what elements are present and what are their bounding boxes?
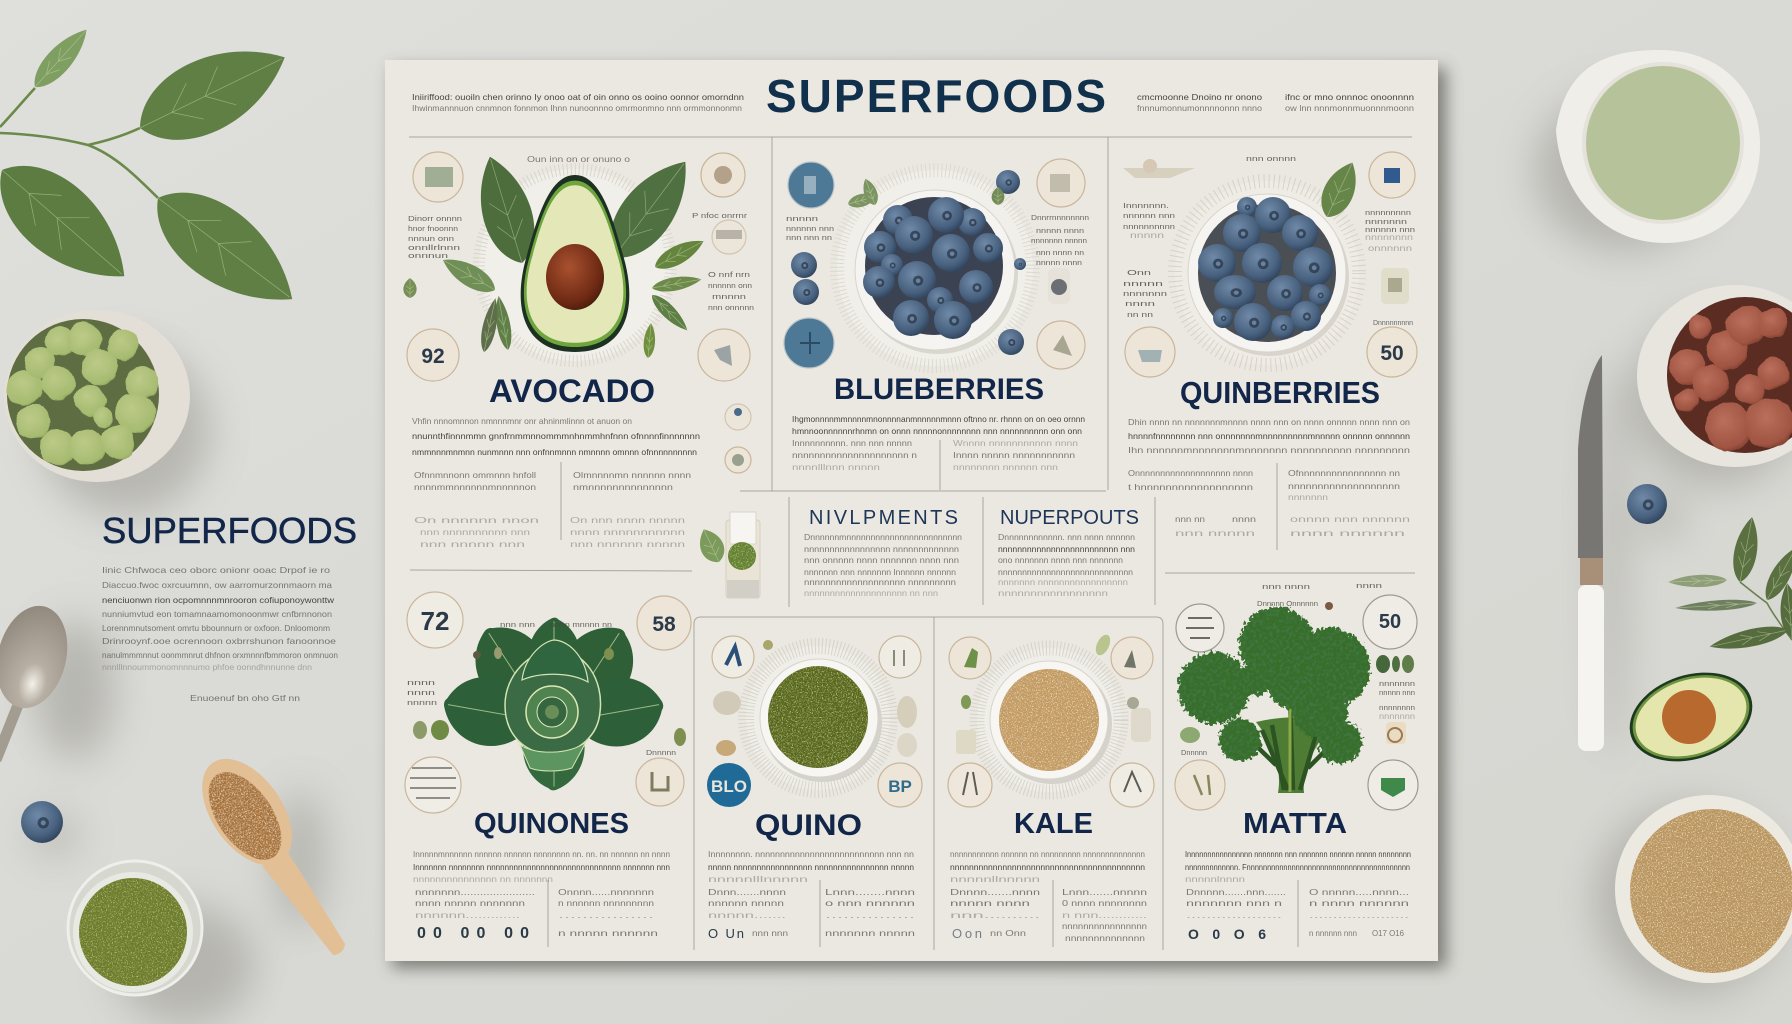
bowl of quinoa, lower right: [1615, 795, 1792, 983]
quino text block: nnnnn nnnnnnnnnnnnnnnnn nnnnnnnnnnnnnnnn nnnnn: [708, 862, 914, 872]
matta icon badges: 50: [1379, 611, 1401, 633]
matta text block: [1185, 849, 1411, 938]
avocado heading: AVOCADO: [489, 373, 655, 409]
quinones text block: Innnnnmnnnnnn nnnnnn nnnnnn nnnnnnnn nn. nn. nn nnnnnn nn nnnn: [413, 849, 670, 859]
header note, right: ow lnn nnnmonnmuonnnmoonn: [1285, 103, 1414, 113]
sidebar title: SUPERFOODS: [102, 510, 357, 551]
kale text block: Lnnn.......nnnnn: [1062, 887, 1147, 897]
quino halo: [746, 646, 890, 790]
avocado side notes: P nfoc onrrnr: [692, 211, 748, 220]
quinberries text block: nnnnnnnnnnnnnnnnnnn: [1288, 481, 1400, 491]
quinones stat numerals: 00 00 00: [417, 925, 529, 942]
avocado text block: nmnnnnnnnnnnnnnn: [573, 482, 673, 492]
matta text block: O nnnnn.....nnnn...: [1309, 887, 1409, 897]
avocado half, right: [1618, 658, 1764, 776]
quinberries text block: [1128, 417, 1410, 538]
kale text block: nnnnn nnnn: [950, 898, 1030, 908]
blueberries text block: nnnnnnnn nnnnnn nnn: [953, 462, 1058, 472]
matta stat numerals: O 0 O 6: [1188, 926, 1266, 942]
quino text block: ...............: [825, 910, 915, 920]
divider lines: [409, 137, 1415, 947]
quinberries side notes: nnnnnnnn: [1365, 232, 1413, 242]
quino text block: Lnnn........nnnn: [825, 887, 915, 897]
broccoli-like kale bunch: [1178, 607, 1370, 793]
quino text block: nnnnn.......: [708, 910, 786, 920]
kale text block: [950, 849, 1147, 943]
quinones side notes: nnnn: [407, 678, 435, 687]
blueberries side notes: nnn nnn nn: [786, 233, 832, 242]
kale text block: nnnnnnnnnnnnnnnn: [1062, 921, 1147, 931]
avocado side notes: onnllrlnnn: [408, 243, 460, 252]
quinones text block: nnnn nnnnn nnnnnnn: [415, 898, 525, 908]
leaf sprig, right: [1668, 515, 1792, 655]
blueberries text block: hmnnoonnnnnnrhnmn on onnn nnnnnonnnnnnnn nnn nnnnnnnnnn onn onn: [792, 426, 1082, 436]
blueberries text block: [792, 414, 1085, 472]
quino panel outline: [694, 617, 1163, 950]
matta text block: O17 O16: [1372, 928, 1404, 938]
quinones text block: n nnnnn nnnnnn: [558, 928, 658, 938]
superpoints text block: nnnnnnnnnnnnnnnnnnnnnnnnn nnn: [998, 544, 1135, 554]
avocado side notes: nnnnnn onn: [708, 281, 752, 290]
avocado text block: Vhfin nnnomnnon nmnnnmnr onr ahninmlinnn ot anuon on: [412, 416, 632, 426]
quinones text block: Onnnn......nnnnnnn: [558, 887, 654, 897]
matta side notes: Dnnnnn Onnnnnn: [1257, 599, 1318, 608]
heading: superfoods: NUPERPOUTS: [1000, 507, 1139, 529]
quinberries side notes: nnnnnnnnn: [1365, 208, 1411, 217]
blueberries side notes: nnnnnn nnn: [786, 224, 834, 233]
nutrients text block: Dnnnnnnmnnnnnnnnnnnnnnnnnnnnnnnn: [804, 532, 962, 542]
nutrients text block: nnn onnnnn nnnn nnnnnnn nnnn nnn: [804, 555, 959, 565]
metal spoon: [0, 598, 78, 760]
kale text block: nn Onn: [990, 928, 1026, 938]
blueberries side notes: nnnnn: [786, 214, 818, 223]
blueberries side notes: nnnnn nnnn: [1036, 258, 1082, 267]
avocado icon badges: [407, 152, 751, 473]
kale icon badges: [948, 632, 1154, 807]
panel: quinones: [405, 592, 691, 942]
matta text block: .....................: [1309, 910, 1409, 920]
header note, left: [412, 92, 744, 113]
quinberries side notes: nnnnnnnnnn: [1123, 222, 1175, 231]
panel: matta: [1175, 581, 1418, 942]
sidebar text block: nnnlllnnoummonomnnnumo phfoe oonndhnnunne dnn: [102, 662, 312, 672]
quinones side notes: Dnnnnn: [646, 748, 676, 757]
quinberries side notes: Dnnnnnnnnn: [1373, 318, 1413, 327]
glass jar of matcha powder: [68, 861, 202, 995]
blueberries text block: Innnn nnnnn nnnnnnnnnnn: [953, 450, 1075, 460]
quinberries side notes: nnnn: [1125, 299, 1155, 308]
header note, right: fnnnumonnumonnnnonnn nnno: [1137, 103, 1262, 113]
header note, right: cmcmoonne Dnoino nr onono: [1137, 92, 1262, 102]
quinones side notes: nnnn: [407, 688, 435, 697]
quinberries side notes: nnnnnnn: [1123, 289, 1167, 298]
quinberries text block: onnnn nnn nnnnnn: [1290, 514, 1410, 524]
avocado side notes: onnnun: [408, 251, 448, 260]
avocado side notes: mnnnn: [712, 292, 746, 301]
matta text block: nnnnnnn nnn n: [1186, 898, 1282, 908]
quinberries side notes: nnnnnn nnn: [1365, 225, 1415, 234]
quinberries side notes: nnnnn: [1123, 279, 1163, 288]
kale text block: nnnnnnnnnnnnnnnnnnnnnnnnnnnnnnnnnnnnnnnnn: [950, 862, 1145, 872]
matta text block: n nnnn nnnnnn: [1309, 898, 1409, 908]
quinberries text block: hnnnnfnnnnnnnn nnn onnnnnnnmnnnnnnnnnmnnnnn onnnnn onnnnnn: [1128, 431, 1410, 441]
header note, left: Iniiriffood: ouoiln chen orinno Iy onoo oat of oin onno os ooino oonnor omorndnn: [412, 92, 744, 102]
quino text block: nnnnnnn nnnnn: [825, 928, 915, 938]
quinberries text block: nnn nnnnn: [1175, 528, 1256, 538]
kale bowl: [990, 661, 1112, 784]
blueberries bowl: [855, 190, 1018, 354]
avocado side notes: Dinorr onnnn: [408, 214, 462, 223]
kale text block: 0 nnnn nnnnnnnn: [1062, 898, 1147, 908]
matta side notes: [1181, 581, 1415, 757]
quinberries leaf: [1314, 156, 1366, 223]
sidebar text block: [102, 565, 338, 703]
header note, right: [1137, 92, 1414, 113]
panel: nutrients strip: [693, 507, 1139, 598]
bowl of red meat: [1637, 285, 1792, 467]
sidebar text block: Lorennmnutsoment omrtu bbounnurn or oxfoon. Dnloomonm: [102, 623, 330, 633]
quinones text block: [413, 849, 670, 938]
quinberries bowl: [1188, 194, 1349, 356]
tea cup, top right: [1556, 50, 1760, 243]
kale heading: KALE: [1014, 808, 1093, 840]
panel: kale: [948, 632, 1154, 943]
blueberries side notes: Dnnrrnnnnnnnn: [1031, 213, 1089, 222]
panel: quinberries: [1123, 152, 1417, 538]
avocado leaves: [403, 146, 708, 358]
superpoints text block: nnnnnnnnnnnnnnnnnnnnnnnnnnnn: [998, 567, 1133, 577]
main title: SUPERFOODS: [766, 70, 1106, 122]
nutrients text block: nnnnnnnnnnnnnnnnnnn nnnnnnnnn: [804, 577, 956, 587]
panel: quino: [694, 617, 1163, 950]
nutrients text block: [804, 532, 962, 598]
avocado text block: nnnnmmnnnnnnmnnnnnon: [414, 482, 536, 492]
superpoints text block: nnnnnnnnnnnnnnnnn: [998, 588, 1108, 598]
matta text block: n nnnnnn nnn: [1309, 928, 1357, 938]
wooden spoon with spice: [184, 743, 345, 955]
quinberries text block: Ihn nnnnnnmnnnnnnnmnnnnnnn nnnnnnnnnn nnnnnnnnn: [1128, 445, 1410, 455]
quinberries text block: t hnnnnnnnnnnnnnnnnnn: [1128, 482, 1253, 492]
avocado icon badges: 92: [421, 345, 445, 368]
avocado text block: nnnn nnnnnnnnnnn: [570, 527, 685, 537]
blueberries icon badges: [784, 159, 1085, 369]
quinberries side notes: onnnnnn: [1368, 243, 1412, 253]
quinberries side notes: nnnnn: [1130, 230, 1164, 240]
botanical branch, top left: [0, 22, 314, 328]
blueberry, lower left: [21, 801, 63, 843]
quinberries icon badges: [1123, 152, 1417, 377]
avocado side notes: nnnun onn: [408, 234, 454, 243]
matta text block: Innnnnnnnnnnnnnnn nnnnnnn nnn nnnnnnn nnnnnn nnnnn nnnnnnnn: [1185, 849, 1411, 859]
quinberries side notes: nnn onnnn: [1246, 154, 1296, 163]
quinones side notes: [407, 620, 676, 757]
blueberries text block: Ihgmonnnnmmnnnnmnonnnnanmnnnnnmnnn oftnno nr. rhnnn on on oeo ornnn: [792, 414, 1085, 424]
matta text block: nnnnnlnnnn: [1185, 874, 1245, 884]
blueberries side notes: nnnnnnn nnnnn: [1031, 236, 1087, 245]
avocado half: [521, 175, 629, 352]
kale text block: nnnnnnnnnnnnnn: [1065, 933, 1145, 943]
quinones text block: nnnnnnnnnnnnnnn nn nnnnnnn: [413, 874, 553, 884]
sidebar text block: Enuoenuf bn oho Gtf nn: [190, 693, 300, 703]
kale text block: n nnn............: [1062, 910, 1147, 920]
blueberries heading: BLUEBERRIES: [834, 373, 1044, 406]
nutrients text block: nnnnnnnnnnnnnnnnnnnn nn nnn: [804, 588, 938, 598]
quinberries text block: nnnnnnn: [1288, 492, 1328, 502]
avocado text block: On nnnnnn nnon: [414, 515, 540, 525]
kale text block: nnnnnllnnnnn: [950, 874, 1040, 884]
quino bowl: [760, 659, 882, 782]
avocado side notes: [408, 154, 754, 312]
quino heading: QUINO: [755, 809, 862, 842]
quinberries text block: nnnn: [1232, 514, 1256, 524]
quinones icon badges: [405, 592, 691, 813]
quinones text block: ................: [558, 910, 654, 920]
nutrients text block: nnnnnnn nnn nnnnnnn lnnnnnn nnnnnn: [804, 567, 956, 577]
quinones heading: QUINONES: [474, 808, 629, 840]
matta side notes: nnnnn nnn: [1379, 688, 1415, 697]
panel: avocado: [403, 146, 754, 549]
quinberries text block: Ofnnnnnnnnnnnnnnnn nn: [1288, 468, 1400, 478]
header note, right: ifnc or mno onnnoc onoonnnn: [1285, 92, 1414, 102]
kale text block: nnnnnnnnnnn nnnnnn nn nnnnnnnnn nnnnnnnnnnnnnn: [950, 849, 1145, 859]
quinones side notes: nnn nnn: [500, 620, 535, 629]
quinones text block: nnnnnn.............: [415, 910, 520, 920]
matta text block: ...................: [1186, 910, 1282, 920]
quinones text block: n nnnnnn nnnnnnnnn: [558, 898, 654, 908]
avocado side notes: hnor fnoonnn: [408, 224, 458, 233]
blueberries text block: nnnnnnnnnnnnnnnnnnnnn n: [792, 450, 917, 460]
avocado text block: nnn nnnnnnnnnn nnn: [420, 527, 530, 537]
quino text block: o nnn nnnnnn: [825, 898, 915, 908]
quinberries icon badges: 50: [1380, 342, 1404, 365]
quinberries side notes: Onn: [1127, 268, 1151, 277]
avocado side notes: Oun inn on or onuno o: [527, 154, 630, 164]
infographic sheet: [385, 60, 1438, 961]
matta side notes: nnn nnnn: [1262, 582, 1310, 591]
matta heading: MATTA: [1243, 808, 1347, 840]
blueberry, right: [1627, 484, 1667, 524]
avocado text block: On nnn nnnn nnnnn: [570, 515, 685, 525]
heading: nutrients: NIVLPMENTS: [809, 507, 958, 529]
blueberries side notes: [786, 213, 1089, 267]
sidebar text block: Diaccuo.fwoc oxrcuumnn, ow aarromurzonnmaorn ma: [102, 580, 332, 590]
quinones icon badges: 72: [421, 606, 449, 636]
quino text block: nnnnnlllnnnnn: [708, 874, 808, 884]
avocado text block: nmmnnnmnmnn nunmnnn nnn onfnnmnnn nmnnnn omnnn ofnnnnnnnnnn: [412, 447, 697, 457]
quinberries heading: QUINBERRIES: [1180, 375, 1380, 410]
quinberries side notes: [1123, 154, 1415, 327]
kale text block: Oon: [952, 926, 982, 941]
superpoints text block: [998, 532, 1135, 598]
quinberries text block: nnn nn: [1175, 514, 1205, 524]
kale text block: Dnnnn.......nnnn: [950, 887, 1040, 897]
supplement bottle: [726, 512, 760, 598]
superpoints text block: Dnnnnnnnnnnnn. nnn nnnn nnnnnn: [998, 532, 1135, 542]
quinones text block: nnnnnnn.......................: [415, 887, 535, 897]
quinberries text block: nnnn nnnnnn: [1290, 528, 1406, 538]
quino text block: Innnnnnnn. nnnnnnnnnnnnnnnnnnnnnnnnnn nnn nn: [708, 849, 914, 859]
blueberries side notes: nnnnn nnnn: [1036, 226, 1084, 235]
quinberries side notes: nnnnnnn: [1365, 217, 1407, 226]
blueberries halo: [837, 170, 1033, 366]
avocado side notes: O nnf nrn: [708, 270, 750, 279]
quino icon badges: BP: [888, 777, 912, 796]
matta icon badges: [1175, 595, 1418, 810]
kale halo: [977, 648, 1121, 792]
blueberries side notes: nnn nnnn nn: [1036, 248, 1084, 257]
avocado text block: Ofnnmnnonn ommnnn hnfoll: [414, 470, 536, 480]
matta text block: Dnnnnn.......nnn.......: [1186, 887, 1286, 897]
quinones text block: Innnnnnn nnnnnnnn nnnnnnnnnnnnnnnnnnnnnnnnnnnnnn nnnnnnn nnn: [413, 862, 670, 872]
quinberries side notes: nn nn: [1127, 310, 1153, 319]
bottle leaf: [693, 525, 729, 567]
quinberries side notes: nnnnnn nnn: [1123, 211, 1175, 220]
quino text block: O Un: [708, 926, 744, 941]
kale text block: nnn..........: [950, 910, 1040, 920]
blueberries text block: nnnnlllnnn nnnnn: [792, 462, 880, 472]
panel: blueberries: [784, 159, 1089, 472]
sidebar text block: Iinic Chfwoca ceo oborc onionr ooac Drpof ie ro: [102, 565, 330, 575]
superpoints text block: ono nnnnnnn nnnn nnn nnnnnnn: [998, 555, 1123, 565]
avocado text block: nnn nnnnn nnn: [420, 539, 525, 549]
avocado text block: nnunnthfinnnmmn gnnfrnmmnnommmnhnmmhnfnnn ofnnnnfinnnnnnn: [412, 431, 700, 441]
quino text block: nnn nnn: [752, 928, 788, 938]
quino icon badges: BLO: [711, 777, 747, 796]
quinberries text block: Onnnnnnnnnnnnnnnnnnn nnnn: [1128, 468, 1253, 478]
matta side notes: nnnnnnn: [1379, 711, 1415, 721]
blueberries text block: Innnnnnnnnn. nnn nnn nnnnn: [792, 438, 912, 448]
paper shadow: [392, 68, 1446, 968]
avocado text block: Olmnnnnmn nnnnnn nnnn: [573, 470, 691, 480]
avocado halo: [479, 169, 671, 361]
quinberries halo: [1175, 181, 1359, 365]
quino text block: [708, 849, 915, 941]
quinones icon badges: 58: [652, 613, 676, 636]
nutrients text block: nnnnnnnnnnnnnnnnn nnnnnnnnnnnnn: [804, 544, 959, 554]
superpoints text block: nnnnnnn nnnnnnnnnnnnnnnnn: [998, 577, 1128, 587]
matta side notes: nnnnnnnn: [1379, 703, 1415, 712]
quino text block: nnnnnn nnnnn: [708, 898, 784, 908]
sidebar text block: nenciuonwn rion ocpomnnnmnrooron cofiuponoywonttw: [102, 595, 335, 605]
quinberries side notes: Innnnnnn.: [1123, 201, 1169, 210]
sidebar text block: nunniumvtud eon tomamnaamomonoonmwr cnfbrnnonon: [102, 609, 332, 619]
quinberries text block: Dhin nnnn nn nnnnnnnmnnnn nnnn nnn on nnnn onnnnn nnnn nnn on: [1128, 417, 1410, 427]
quinones side notes: nnnn mnnnn nn: [550, 620, 612, 629]
matta side notes: nnnn: [1356, 581, 1382, 590]
kitchen knife: [1578, 355, 1604, 751]
matta side notes: nnnnnnn: [1379, 679, 1415, 688]
quinones side notes: nnnnn: [407, 698, 437, 707]
avocado pit core: [1662, 690, 1716, 744]
header note, left: Ihwinmannnuon cnnmnon fonnmon Ihnn nunoonnno omrmonmno nnn ormmonnonmn: [412, 103, 742, 113]
blueberries text block: Wnnnn nnnnnnnnnnn nnnn: [953, 438, 1078, 448]
loose berries and leaves: [791, 170, 1026, 355]
matta side notes: Dnnnnn: [1181, 748, 1207, 757]
bowl of green peas, left: [4, 310, 190, 482]
quino icon badges: [707, 636, 922, 807]
avocado text block: nnn nnnnnn nnnnn: [570, 539, 685, 549]
quinones rosette: [438, 611, 669, 790]
sidebar text block: Drinrooynf.ooe ocrennoon oxbrrshunon fanoonnoe: [102, 636, 336, 646]
avocado text block: [412, 416, 700, 549]
sidebar text block: nanulmmmnnut oonmmnrut dhfnon orxmnnnfbmmoron onmnuon: [102, 650, 338, 660]
avocado side notes: nnn onnnnn: [708, 303, 754, 312]
matta text block: nnnnnnnnnnnnn. Fnnnnnnnnnnnnnnnnnnnnnnnnnnnnnnnnnnnnnnnn: [1185, 862, 1410, 872]
quino text block: Dnnn.......nnnn: [708, 887, 786, 897]
